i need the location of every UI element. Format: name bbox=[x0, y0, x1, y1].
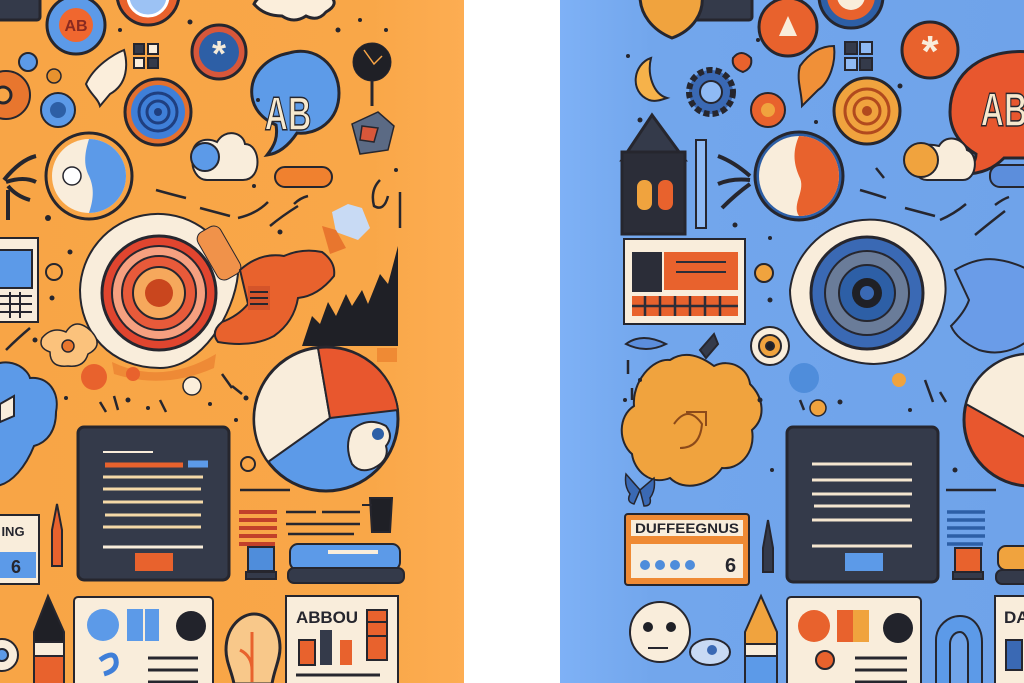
decorative strokes blue bbox=[628, 168, 1009, 490]
icon: left label card: 6 bbox=[11, 557, 21, 577]
icon: black jagged silhouette bbox=[302, 246, 398, 346]
icon: leaf bubble bbox=[86, 50, 126, 106]
icon: blue pill bbox=[990, 165, 1024, 187]
panel: DUFFEEGNUS card: 6 bbox=[725, 555, 736, 577]
icon: top left window bbox=[0, 0, 40, 20]
icon: left label card bbox=[0, 515, 39, 584]
icon: lightbulb bbox=[226, 614, 280, 683]
panel: shape card bbox=[74, 597, 213, 683]
icon: star badge orange: * bbox=[921, 27, 939, 76]
icon: AB circle small bbox=[47, 0, 105, 54]
icon: plant bbox=[718, 156, 750, 208]
text lines bbox=[286, 512, 360, 534]
icon: small blue ring bbox=[41, 93, 75, 127]
icon: top cloud bbox=[254, 0, 334, 20]
icon: target shadow bbox=[112, 354, 216, 381]
icon: pale cluster bbox=[322, 204, 370, 254]
panel: blue variant illustrations bbox=[622, 0, 1024, 683]
icon: black clock tree bbox=[353, 43, 391, 106]
icon: A badge bbox=[759, 0, 817, 56]
icon: book stack right bbox=[996, 546, 1024, 584]
icon: pen bbox=[52, 504, 62, 566]
icon: speech bubble AB orange bbox=[950, 52, 1024, 174]
icon: orange dots bbox=[81, 348, 397, 395]
icon: dark pen bbox=[763, 520, 773, 572]
icon: blue arch bbox=[936, 616, 982, 683]
panel: DUFFEEGNUS card: DUFFEEGNUS bbox=[635, 520, 739, 536]
icon: rock cluster bbox=[352, 112, 394, 154]
icon: eye leaf bbox=[626, 334, 718, 358]
icon: speech bubble AB bbox=[252, 51, 339, 155]
icon: house tower bbox=[622, 115, 685, 234]
icon: cloud blue bbox=[191, 133, 258, 180]
panel: DUFFEEGNUS card bbox=[625, 514, 749, 585]
icon: blue cloud left bbox=[0, 362, 57, 486]
decorative marks blue bbox=[623, 38, 958, 472]
icon: crayon bbox=[34, 596, 64, 683]
icon: orange spiral bbox=[834, 78, 900, 144]
icon: crescent moon bbox=[636, 58, 667, 101]
icon: top ring orange bbox=[819, 0, 883, 28]
icon: pale blue dots bbox=[789, 363, 906, 416]
icon: orange cart bbox=[953, 548, 983, 579]
icon: grid squares blue bbox=[845, 42, 872, 70]
decorative marks bbox=[19, 18, 398, 471]
panel: DA report card bbox=[995, 596, 1024, 683]
icon: grid squares bbox=[134, 44, 158, 68]
icon: cloud orange bbox=[904, 138, 975, 180]
icon: half disc bbox=[46, 133, 132, 219]
icon: star badge: * bbox=[212, 33, 226, 74]
icon: face bbox=[630, 602, 730, 665]
icon: orange cloud blob bbox=[622, 355, 762, 486]
icon: big target bbox=[80, 214, 244, 368]
icon: left label card: ING bbox=[1, 524, 25, 539]
panel: ABBOU report card: ABBOU bbox=[296, 608, 358, 627]
icon: tall pillar bbox=[696, 140, 706, 228]
panel: ABBOU report card bbox=[286, 596, 398, 683]
icon: red stripes bbox=[239, 512, 277, 544]
icon: blue swirl bbox=[951, 259, 1024, 352]
icon: AB circle small: AB bbox=[64, 18, 88, 35]
decorative strokes bbox=[6, 180, 400, 490]
icon: small heart bbox=[733, 53, 751, 72]
icon: butterfly bbox=[626, 474, 654, 506]
icon: top shield window bbox=[640, 0, 752, 38]
icon: pill bbox=[275, 167, 332, 187]
icon: orange circle small bbox=[755, 264, 773, 282]
icon: top ring bbox=[117, 0, 179, 25]
icon: leaf orange bbox=[799, 46, 834, 106]
icon: speech bubble AB: AB bbox=[265, 87, 311, 141]
panel: shape card orange bbox=[787, 597, 921, 683]
panel: dark terminal card bbox=[78, 427, 229, 580]
icon: left mini circle bbox=[0, 639, 18, 671]
panel: orange A variant background bbox=[0, 0, 464, 683]
icon: spiral target bbox=[125, 79, 191, 145]
icon: black mug bbox=[362, 498, 392, 532]
icon: small orange ring bbox=[751, 93, 785, 127]
icon: orange swirl bbox=[215, 251, 334, 344]
icon: half disc orange bbox=[755, 132, 843, 220]
icon: book stack bbox=[288, 544, 404, 583]
icon: star badge bbox=[192, 25, 246, 79]
chart: pie bbox=[254, 347, 398, 491]
icon: tiny cart bbox=[246, 547, 276, 579]
icon: star badge orange bbox=[902, 22, 958, 78]
icon: left gear bbox=[0, 71, 30, 119]
icon: left window chart bbox=[0, 238, 38, 322]
panel: orange table bbox=[624, 239, 745, 324]
icon: big lens bbox=[790, 220, 946, 364]
icon: left cream flowers bbox=[41, 324, 97, 366]
panel: blue B variant background bbox=[560, 0, 1024, 683]
chart: pie orange bbox=[964, 354, 1024, 486]
panel: orange variant illustrations bbox=[0, 0, 404, 683]
panel: dark terminal card blue bbox=[787, 427, 938, 582]
icon: orange crayon bbox=[745, 596, 777, 683]
icon: blue stripes bbox=[947, 512, 985, 544]
icon: gear bbox=[689, 70, 733, 114]
icon: left plant bbox=[4, 156, 36, 220]
icon: eye pendant bbox=[751, 327, 789, 365]
